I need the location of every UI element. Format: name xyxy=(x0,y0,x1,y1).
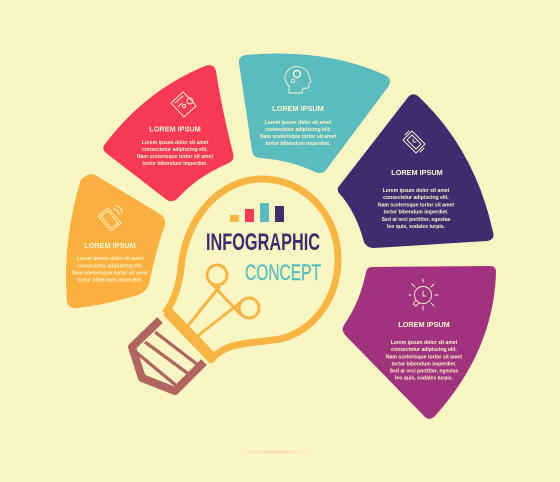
panel: red xyxy=(103,65,233,201)
text: red: Nam scelerisque tortor sit amet xyxy=(137,154,213,160)
text: orange xyxy=(72,256,148,284)
bulb collar xyxy=(167,311,214,360)
text: purple: Sed at orci porttitor, egestas xyxy=(390,368,459,374)
text: red xyxy=(137,140,213,167)
text: navy: Nam scelerisque tortor sit amet xyxy=(378,202,454,208)
text: teal: consectetur adipiscing elit. xyxy=(265,127,331,133)
panel: orange xyxy=(66,174,165,308)
text: teal: tortor bibendum imperdiet. xyxy=(265,141,331,147)
text: purple: consectetur adipiscing elit. xyxy=(391,347,457,353)
text: orange: tortor bibendum imperdiet. xyxy=(77,278,143,284)
icon: head gear xyxy=(285,67,311,93)
bulb outline xyxy=(165,179,338,361)
panel: purple xyxy=(343,266,496,419)
panel: navy xyxy=(338,94,493,248)
text: navy: consectetur adipiscing elit. xyxy=(383,195,449,201)
icon: phone xyxy=(98,206,122,231)
light bulb xyxy=(132,179,338,391)
text: purple xyxy=(386,340,462,382)
heading: orange: LOREM IPSUM xyxy=(84,241,136,250)
icon: light bulb xyxy=(409,279,438,310)
text: purple: Nam scelerisque tortor sit amet xyxy=(386,354,462,360)
bulb filament xyxy=(186,265,259,338)
text: orange: consectetur adipiscing elit. xyxy=(77,264,143,270)
text: navy xyxy=(378,188,454,230)
text: purple: Lorem ipsum dolor sit amet xyxy=(391,340,458,346)
heading: purple: LOREM IPSUM xyxy=(398,320,450,329)
title: concept: CONCEPT xyxy=(245,260,321,285)
heading: teal: LOREM IPSUM xyxy=(272,104,324,113)
bulb base stripes xyxy=(137,332,198,387)
text: purple: leo quis, sodales turpis. xyxy=(395,376,454,382)
panel: teal xyxy=(239,54,390,173)
text: navy: leo quis, sodales turpis. xyxy=(387,224,446,230)
text: navy: tortor bibendum imperdiet. xyxy=(383,210,449,216)
text: orange: Lorem ipsum dolor sit amet xyxy=(77,256,144,262)
icon: watch xyxy=(403,131,425,153)
text: red: tortor bibendum imperdiet. xyxy=(142,161,208,167)
text: teal: Lorem ipsum dolor sit amet xyxy=(265,120,332,126)
ground shadow xyxy=(237,450,313,454)
text: purple: tortor bibendum imperdiet. xyxy=(391,362,457,368)
text: red: consectetur adipiscing elit. xyxy=(142,147,208,153)
text: navy: Lorem ipsum dolor sit amet xyxy=(383,188,450,194)
bulb base xyxy=(132,320,204,391)
icon: document gear xyxy=(171,92,196,117)
text: red: Lorem ipsum dolor sit amet xyxy=(142,140,209,146)
title: infographic: INFOGRAPHIC xyxy=(206,230,320,256)
text: navy: Sed at orci porttitor, egestas xyxy=(382,217,451,223)
text: teal xyxy=(260,120,336,147)
heading: red: LOREM IPSUM xyxy=(149,124,201,134)
text: orange: Nam scelerisque tortor sit amet xyxy=(72,270,148,276)
mini bar chart xyxy=(230,203,284,222)
heading: navy: LOREM IPSUM xyxy=(391,168,443,177)
text: teal: Nam scelerisque tortor sit amet xyxy=(260,134,336,140)
